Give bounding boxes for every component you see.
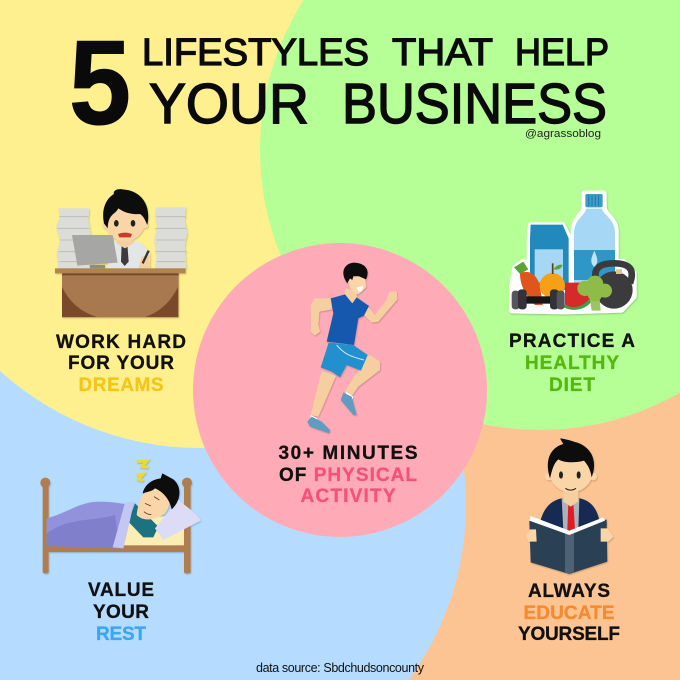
title numeral 5: 5 xyxy=(69,16,131,150)
panel: yellow circle xyxy=(0,0,498,448)
label: practice a healthy diet xyxy=(509,331,635,396)
label: practice a healthy diet: PRACTICE A xyxy=(509,331,635,352)
panel: orange background xyxy=(300,380,680,680)
label: value your rest xyxy=(88,580,154,645)
label: work hard for your dreams: FOR YOUR xyxy=(68,353,174,374)
label: 30+ minutes of physical activity: OF PHYSICAL xyxy=(279,465,417,486)
title line 2: BUSINESS xyxy=(342,72,607,136)
label: always educate yourself: YOURSELF xyxy=(518,624,620,645)
title line 2 xyxy=(149,72,607,136)
label: work hard for your dreams xyxy=(56,332,186,396)
label: value your rest: REST xyxy=(96,624,146,645)
label: always educate yourself: EDUCATE xyxy=(524,603,614,624)
icon: man reading book xyxy=(526,438,613,574)
panel: blue circle xyxy=(0,209,466,680)
label: work hard for your dreams: DREAMS xyxy=(78,375,164,396)
label: value your rest: VALUE xyxy=(88,580,154,601)
label: work hard for your dreams: WORK HARD xyxy=(56,332,186,353)
label: value your rest: YOUR xyxy=(93,602,149,623)
title line 1: HELP xyxy=(515,32,609,74)
label: always educate yourself xyxy=(518,581,620,645)
label: practice a healthy diet: HEALTHY xyxy=(525,353,619,374)
source note: data source: Sbdchudsoncounty xyxy=(256,661,425,675)
handle: @agrassoblog xyxy=(525,128,601,140)
label: 30+ minutes of physical activity: ACTIVITY xyxy=(300,486,396,507)
title xyxy=(69,16,609,150)
icon: man sleeping in bed xyxy=(40,461,201,573)
panel: pink circle xyxy=(193,243,487,537)
panel: green circle xyxy=(260,0,680,430)
title line 1: THAT xyxy=(392,32,493,74)
label: 30+ minutes of physical activity xyxy=(278,443,418,507)
icon: healthy food and bottles xyxy=(512,193,634,312)
title line 1 xyxy=(142,32,609,74)
label: 30+ minutes of physical activity: 30+ MINUTES xyxy=(278,443,418,464)
title line 2: YOUR xyxy=(149,72,309,136)
icon: running man xyxy=(307,263,397,433)
title line 1: LIFESTYLES xyxy=(142,32,369,74)
icon: man working at desk xyxy=(55,189,187,317)
label: always educate yourself: ALWAYS xyxy=(528,581,610,602)
label: practice a healthy diet: DIET xyxy=(549,375,595,396)
